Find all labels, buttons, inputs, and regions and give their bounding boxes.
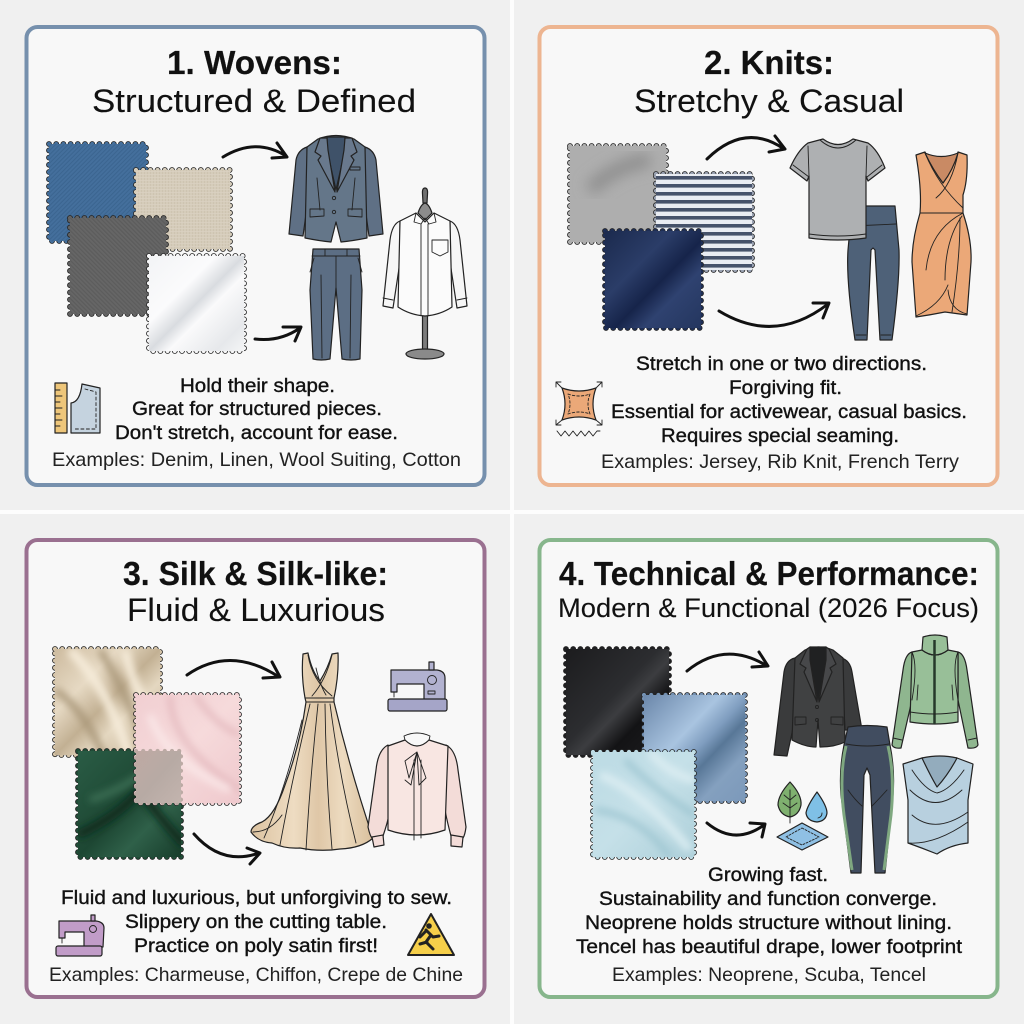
text block: Sustainability and function converge. bbox=[599, 888, 937, 910]
icon: sewing machine (grey) bbox=[388, 662, 447, 711]
panel frame bbox=[540, 540, 998, 997]
panel: wovens bbox=[26, 27, 484, 485]
text block bbox=[576, 864, 963, 986]
panel frame bbox=[540, 27, 998, 485]
heading: 1. Wovens: bbox=[167, 44, 342, 81]
text block bbox=[49, 887, 463, 986]
arrow: to jacket bbox=[223, 143, 287, 158]
garment: blazer bbox=[289, 136, 383, 242]
icon: textile diamond bbox=[777, 823, 828, 850]
text block: Examples: Charmeuse, Chiffon, Crepe de Chine bbox=[49, 964, 463, 986]
heading: 2. Knits: bbox=[704, 44, 834, 81]
icon: water drop bbox=[806, 792, 827, 822]
arrow: from swatches to gown hem bbox=[194, 834, 260, 864]
heading bbox=[92, 44, 416, 119]
icon: leaf bbox=[778, 782, 801, 823]
panel: silk and silk-like bbox=[26, 540, 484, 997]
garment: t-shirt bbox=[790, 139, 885, 240]
panel frame bbox=[26, 27, 484, 485]
text block: Neoprene holds structure without lining. bbox=[585, 912, 952, 934]
heading: 3. Silk & Silk-like: bbox=[123, 555, 388, 592]
arrow: to gown bbox=[187, 660, 280, 678]
fabric swatches bbox=[566, 649, 745, 857]
text block bbox=[601, 353, 967, 473]
text block: Don't stretch, account for ease. bbox=[115, 422, 398, 444]
icon: slippery warning bbox=[408, 914, 454, 955]
garment: shirt on mannequin bbox=[383, 188, 467, 359]
text block: Requires special seaming. bbox=[661, 425, 899, 447]
text block: Examples: Jersey, Rib Knit, French Terry bbox=[601, 451, 959, 473]
heading: Modern & Functional (2026 Focus) bbox=[558, 593, 979, 623]
garment: bow blouse bbox=[368, 733, 466, 847]
heading bbox=[123, 555, 388, 628]
icon: stretch fabric bbox=[556, 382, 602, 436]
icon: ruler and pattern piece bbox=[55, 383, 100, 433]
text block: Tencel has beautiful drape, lower footprint bbox=[576, 936, 963, 958]
panel: knits bbox=[540, 27, 998, 485]
text block: Essential for activewear, casual basics. bbox=[611, 401, 967, 423]
text block: Growing fast. bbox=[708, 864, 828, 886]
text block: Hold their shape. bbox=[180, 375, 335, 397]
arrow: to eco icons bbox=[707, 823, 765, 837]
text block: Examples: Neoprene, Scuba, Tencel bbox=[612, 964, 926, 986]
heading: Stretchy & Casual bbox=[634, 83, 904, 119]
garment: black blazer bbox=[774, 647, 862, 756]
text block: Practice on poly satin first! bbox=[134, 935, 378, 957]
fabric swatches bbox=[49, 144, 244, 351]
text block: Forgiving fit. bbox=[729, 377, 842, 399]
text block: Slippery on the cutting table. bbox=[125, 911, 387, 933]
garment: trousers bbox=[310, 249, 362, 360]
icon: sewing machine (purple) bbox=[56, 915, 104, 956]
garment: leggings bbox=[848, 206, 899, 340]
fabric swatches bbox=[570, 146, 752, 328]
text block: Stretch in one or two directions. bbox=[636, 353, 927, 375]
heading: Fluid & Luxurious bbox=[127, 592, 385, 628]
text block: Great for structured pieces. bbox=[132, 398, 382, 420]
arrow: to trousers bbox=[255, 327, 301, 341]
arrow: to blazer bbox=[687, 652, 768, 671]
arrow: to t-shirt bbox=[707, 136, 785, 159]
panel frame bbox=[26, 540, 484, 997]
text block bbox=[52, 375, 461, 471]
text block: Examples: Denim, Linen, Wool Suiting, Cotton bbox=[52, 449, 461, 471]
heading bbox=[634, 44, 904, 119]
panel: technical and performance bbox=[540, 540, 998, 997]
heading bbox=[558, 555, 979, 623]
heading: Structured & Defined bbox=[92, 83, 416, 119]
text block: Fluid and luxurious, but unforgiving to sew. bbox=[61, 887, 452, 909]
fabric swatches bbox=[55, 649, 240, 857]
garment: wrap dress bbox=[912, 152, 971, 317]
garment: performance leggings bbox=[840, 726, 894, 873]
garment: green track jacket bbox=[892, 635, 978, 748]
garment: gown bbox=[251, 653, 373, 850]
arrow: to leggings bbox=[719, 303, 829, 326]
garment: cowl neck top bbox=[903, 756, 973, 854]
heading: 4. Technical & Performance: bbox=[559, 555, 979, 592]
